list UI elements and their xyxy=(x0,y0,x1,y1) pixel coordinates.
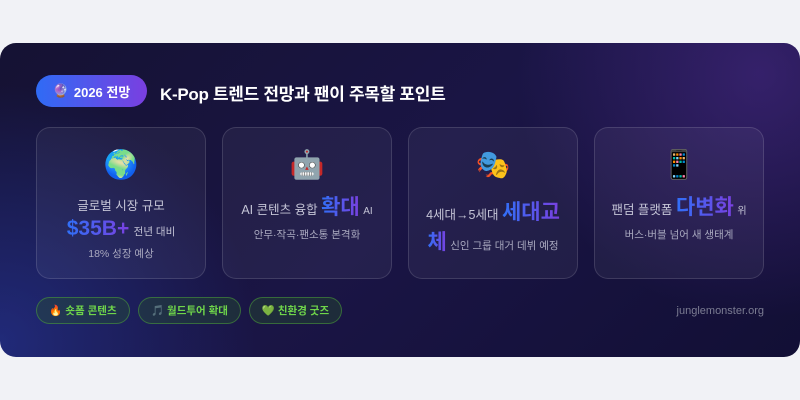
pill: eco goods xyxy=(249,297,342,324)
card: fandom platform: 📱 xyxy=(662,149,696,180)
pill: eco goods: 💚 친환경 굿즈 xyxy=(262,305,329,317)
card: global market: $35B+ 전년 대비 xyxy=(67,217,175,240)
card: AI: 안무·작곡·팬소통 본격화 xyxy=(254,229,360,241)
card: fandom platform: 버스·버블 넘어 새 생태계 xyxy=(625,229,733,241)
card: generation: 4세대→5세대 세대교 xyxy=(426,201,560,224)
badge: 🔮 xyxy=(53,83,69,98)
card: global market xyxy=(36,127,206,279)
footer source: junglemonster.org xyxy=(677,305,764,317)
badge: 2026 전망 xyxy=(74,84,130,100)
card: generation: 체 신인 그룹 대거 데뷔 예정 xyxy=(427,231,559,254)
main panel xyxy=(0,43,800,357)
badge xyxy=(36,75,147,107)
card: generation: 🎭 xyxy=(476,149,510,180)
card: global market: 글로벌 시장 규모 xyxy=(77,199,165,213)
pill: shortform xyxy=(36,297,130,324)
card: AI: 🤖 xyxy=(290,149,324,180)
card: global market: 18% 성장 예상 xyxy=(88,248,154,260)
card: AI: AI 콘텐츠 융합 확대 AI xyxy=(241,196,373,219)
card: AI xyxy=(222,127,392,279)
pill: shortform: 🔥 숏폼 콘텐츠 xyxy=(49,305,117,317)
card: generation xyxy=(408,127,578,279)
title: K-Pop 트렌드 전망과 팬이 주목할 포인트 xyxy=(160,85,445,104)
pill: world tour xyxy=(138,297,241,324)
card: global market: 🌍 xyxy=(104,149,138,180)
pill: world tour: 🎵 월드투어 확대 xyxy=(151,305,228,317)
card: fandom platform: 팬덤 플랫폼 다변화 위 xyxy=(611,196,747,219)
card: fandom platform xyxy=(594,127,764,279)
